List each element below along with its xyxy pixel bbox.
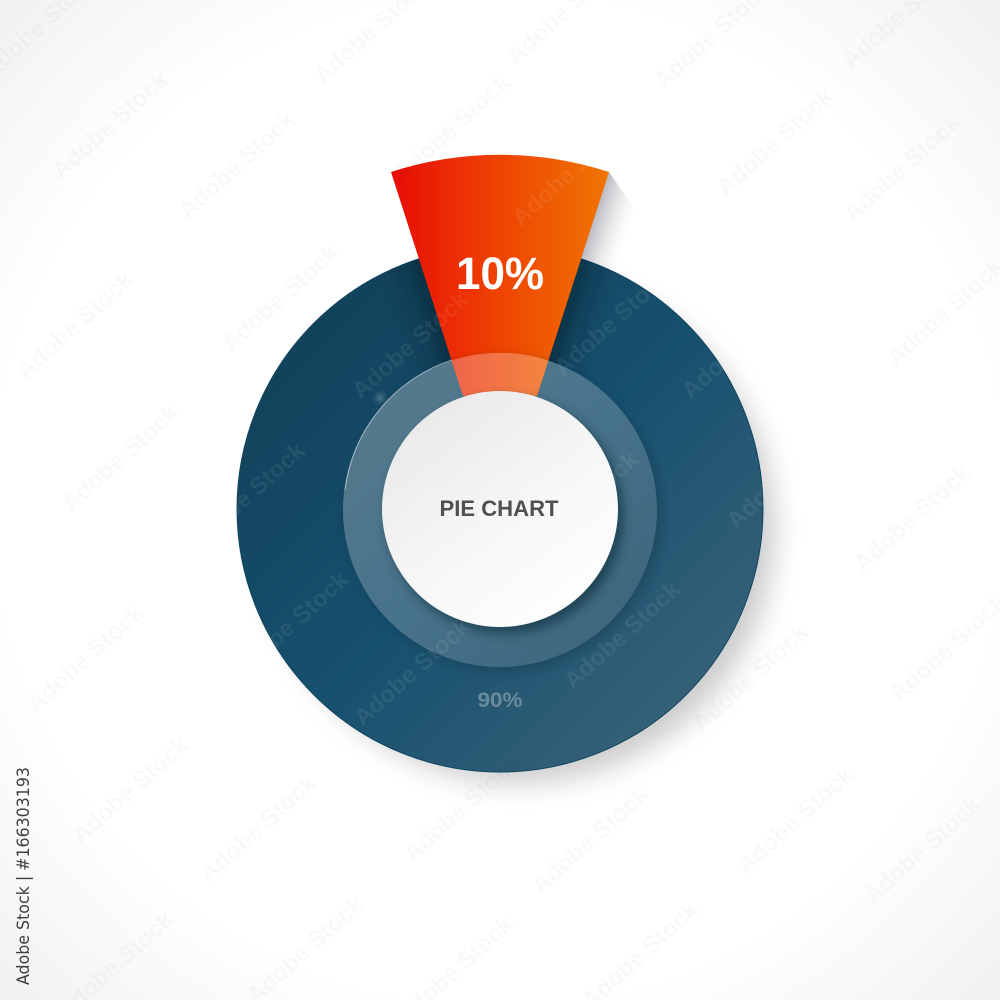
watermarks: Adobe Stock [67,731,194,849]
stock id: Adobe Stock | #166303193 [14,767,34,985]
label: 90%: 90% [478,689,523,712]
watermarks: Adobe Stock [849,459,976,577]
center circle [382,391,624,634]
text: Adobe Stock [507,113,634,231]
text: Adobe Stock [184,437,311,555]
watermarks: Adobe Stock [399,749,526,867]
text: Adobe Stock [347,286,474,404]
wedge segment: 10% [391,155,609,396]
watermarks: Adobe Stock [712,83,839,201]
watermarks: Adobe Stock [12,266,139,384]
watermarks: Adobe Stock [174,106,301,224]
label: pie chart: PIE CHART [440,496,559,521]
watermarks: Adobe Stock [389,69,516,187]
watermarks: Adobe Stock [217,239,344,357]
text: Adobe Stock [559,576,686,694]
watermarks: Adobe Stock [527,781,654,899]
watermarks: Adobe Stock [839,109,966,227]
watermarks: Adobe Stock [47,66,174,184]
label: 10%: 10% [456,248,544,299]
watermarks: Adobe Stock [57,399,184,517]
wedge shadow on donut [399,259,605,372]
donut segment: 90% [236,258,764,772]
ring over wedge [452,353,548,396]
text: Adobe Stock [677,286,804,404]
text: Adobe Stock [387,406,514,524]
text: Adobe Stock [517,446,644,564]
watermarks: Adobe Stock [859,791,986,909]
text: Adobe Stock [722,416,849,534]
text: Adobe Stock [549,263,676,381]
watermarks: Adobe Stock [195,769,322,887]
watermarks: Adobe Stock [687,619,814,737]
text: Adobe Stock [349,613,476,731]
watermarks: Adobe Stock [22,599,149,717]
text: Adobe Stock [227,566,354,684]
glass ring [343,353,662,673]
shadow of donut [265,273,775,783]
wedge long shadow [560,172,634,320]
watermarks: Adobe Stock [732,761,859,879]
